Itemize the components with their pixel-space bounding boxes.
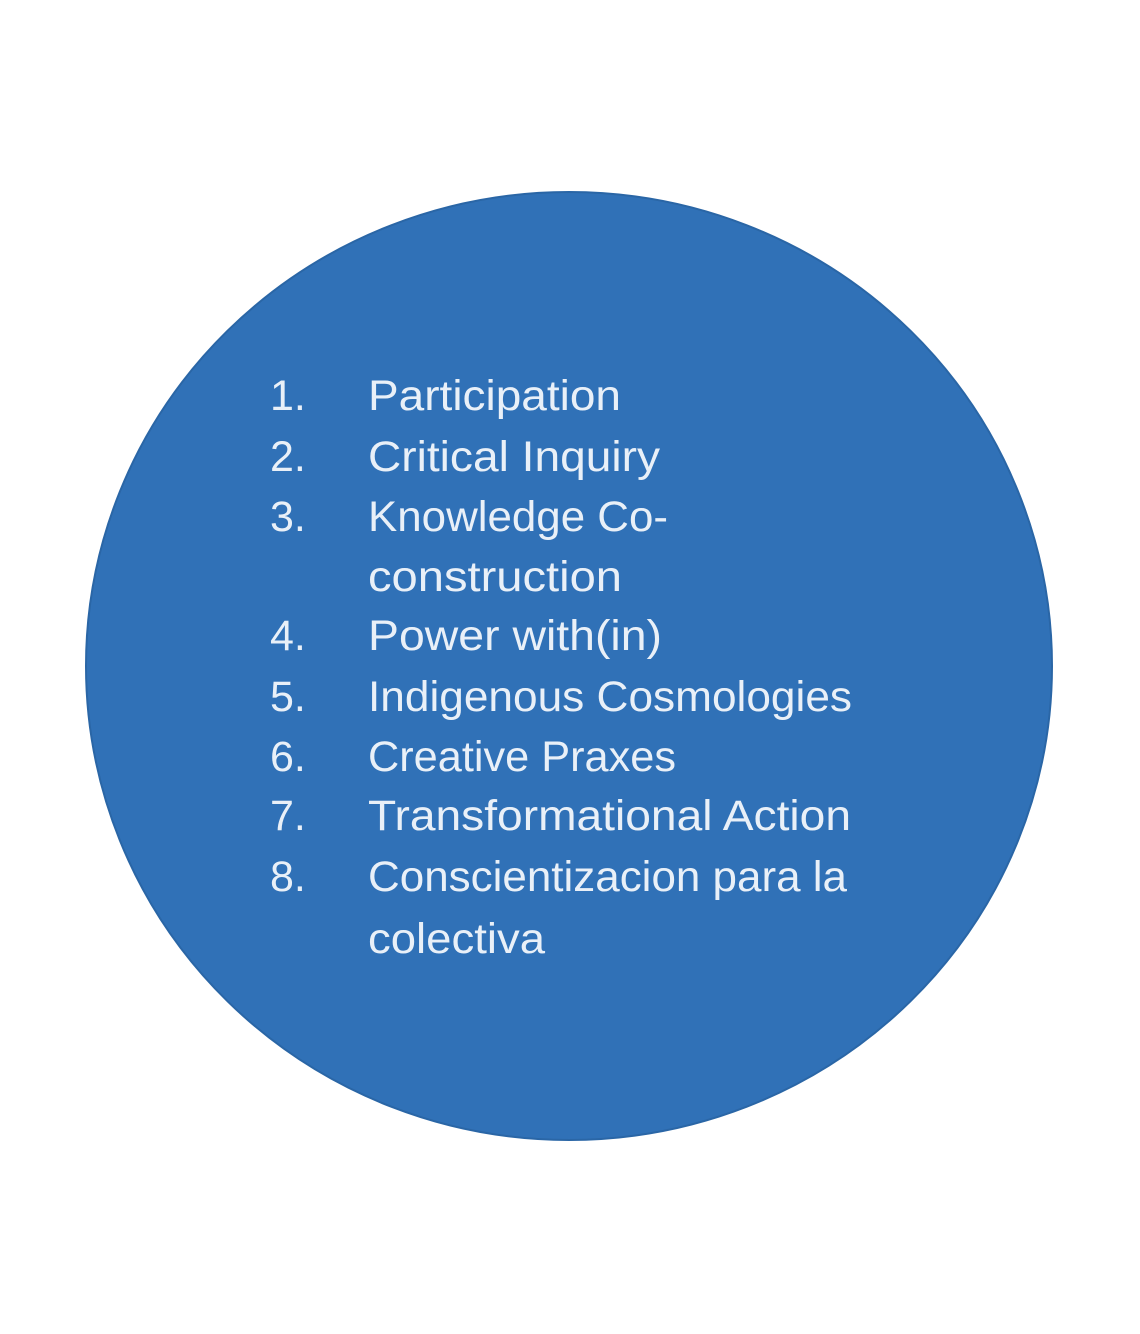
- item 7: Transformational Action: 7.: [270, 792, 306, 840]
- item 4: Power with(in): 4.: [270, 612, 306, 660]
- item 3: Knowledge Co-construction: 3.: [270, 493, 306, 541]
- item 1: Participation: 1.: [270, 372, 306, 420]
- item 4: Power with(in): [270, 612, 662, 660]
- item 1: Participation: [270, 372, 621, 420]
- item 3: Knowledge Co-construction: construction: [368, 553, 622, 601]
- blue circle: [86, 192, 1052, 1140]
- numbered list: [270, 372, 852, 963]
- item 7: Transformational Action: Transformational Action: [368, 792, 851, 840]
- item 2: Critical Inquiry: Critical Inquiry: [368, 433, 661, 481]
- item 5: Indigenous Cosmologies: Indigenous Cosmologies: [368, 673, 852, 721]
- item 8: Conscientizacion para la colectiva: colectiva: [368, 915, 545, 963]
- item 6: Creative Praxes: 6.: [270, 733, 306, 781]
- item 8: Conscientizacion para la colectiva: Conscientizacion para la: [368, 853, 847, 901]
- item 3: Knowledge Co-construction: Knowledge Co-: [368, 493, 668, 541]
- item 3: Knowledge Co-construction: [270, 493, 668, 601]
- item 6: Creative Praxes: Creative Praxes: [368, 733, 676, 781]
- item 8: Conscientizacion para la colectiva: [270, 853, 847, 963]
- item 2: Critical Inquiry: 2.: [270, 433, 306, 481]
- item 4: Power with(in): Power with(in): [368, 612, 662, 660]
- item 2: Critical Inquiry: [270, 433, 661, 481]
- item 5: Indigenous Cosmologies: 5.: [270, 673, 306, 721]
- item 1: Participation: Participation: [368, 372, 621, 420]
- item 8: Conscientizacion para la colectiva: 8.: [270, 853, 306, 901]
